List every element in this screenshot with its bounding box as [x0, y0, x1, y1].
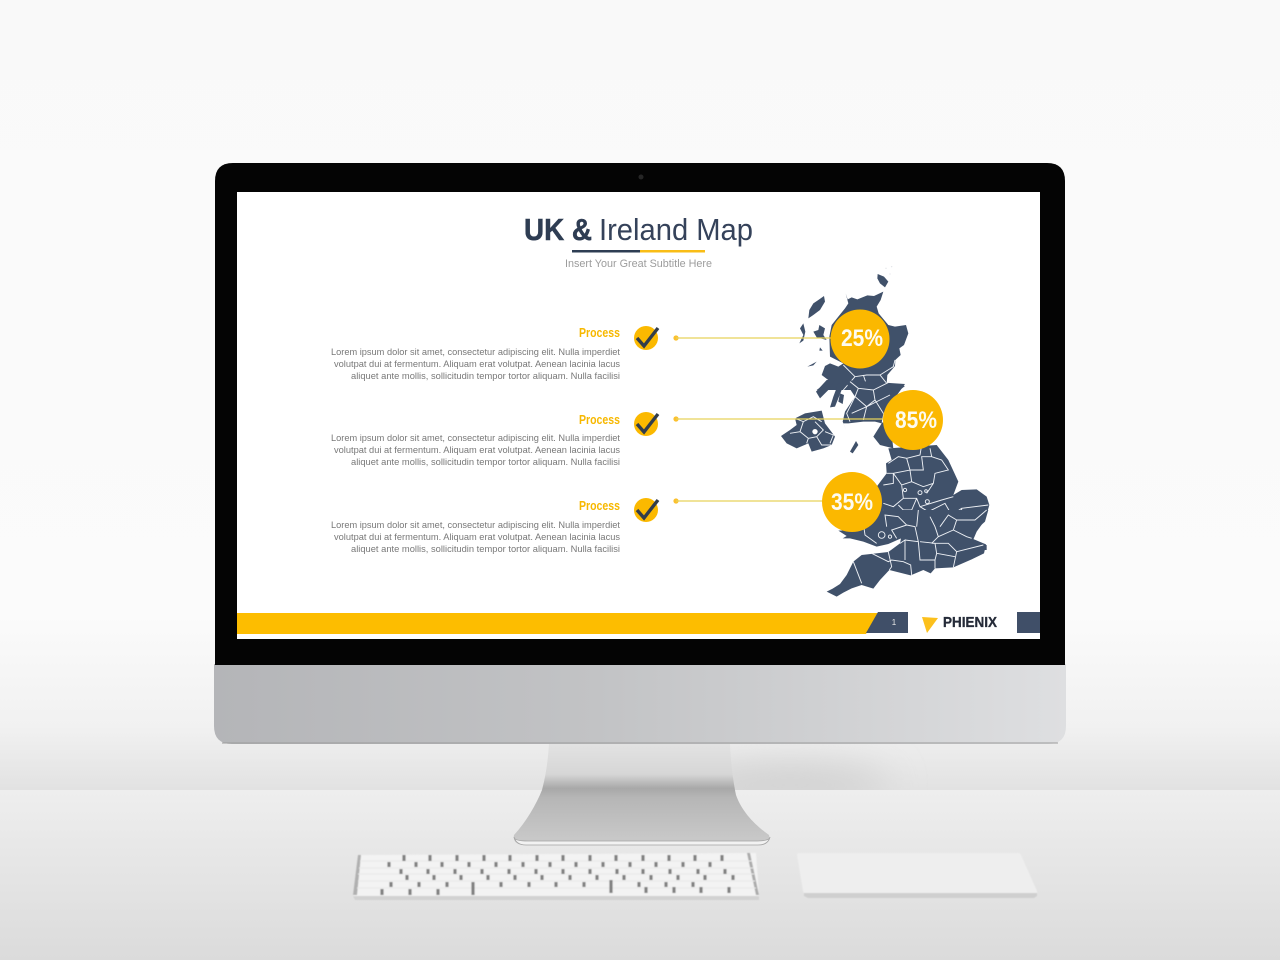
map: northern and central England — [870, 445, 989, 550]
text block 2: aliquet ante mollis, sollicitudin tempor tortor aliquam. Nulla facilisi — [351, 457, 620, 468]
background: desk — [0, 790, 1280, 960]
monitor stand — [514, 744, 770, 845]
map: Wales and southern England — [827, 510, 988, 597]
stand shadow on wall — [690, 763, 890, 807]
leader line 3 — [673, 498, 824, 504]
Lough Neagh — [812, 429, 818, 434]
footer — [237, 612, 1040, 634]
icon: check 3 — [634, 498, 658, 522]
leader line 1 — [673, 335, 832, 341]
map: northern Scotland — [799, 266, 908, 390]
logo wordmark: PHIENIX — [943, 615, 997, 631]
webcam — [638, 174, 644, 180]
screen: slide — [237, 192, 1040, 639]
trackpad — [797, 853, 1037, 898]
badge: 35% — [822, 472, 882, 532]
title: Ireland Map — [599, 212, 753, 247]
subtitle: Insert Your Great Subtitle Here — [565, 258, 712, 270]
badge: 85%: 85% — [895, 407, 937, 434]
map: southern Scotland and Northern Ireland — [781, 380, 905, 453]
item 2 — [331, 412, 658, 468]
badge: 25%: 25% — [841, 325, 883, 352]
badge: 25% — [830, 310, 890, 368]
title — [524, 212, 753, 247]
badge: 85% — [883, 390, 943, 450]
footer yellow bar — [237, 613, 878, 634]
keyboard — [353, 853, 759, 900]
footer page number tab — [866, 612, 908, 633]
text block 2: volutpat dui at fermentum. Aliquam erat volutpat. Aenean lacinia lacus — [334, 445, 620, 456]
text block 2 — [331, 433, 620, 468]
text block 3: aliquet ante mollis, sollicitudin tempor tortor aliquam. Nulla facilisi — [351, 544, 620, 555]
title underline — [572, 250, 705, 252]
monitor bezel — [215, 163, 1065, 665]
heading: process 2: Process — [579, 412, 620, 427]
keyboard key gaps — [382, 855, 733, 895]
text block 3: volutpat dui at fermentum. Aliquam erat volutpat. Aenean lacinia lacus — [334, 532, 620, 543]
heading: process 3: Process — [579, 498, 620, 513]
icon: check 2 — [634, 412, 658, 436]
text block 3: Lorem ipsum dolor sit amet, consectetur adipiscing elit. Nulla imperdiet — [331, 520, 620, 531]
leader line 2 — [673, 416, 885, 422]
text block 1: volutpat dui at fermentum. Aliquam erat volutpat. Aenean lacinia lacus — [334, 359, 620, 370]
text block 1 — [331, 347, 620, 382]
page number: 1 — [892, 618, 897, 627]
logo mark — [922, 617, 938, 633]
item 3 — [331, 498, 658, 555]
icon: check 1 — [634, 326, 658, 350]
text block 2: Lorem ipsum dolor sit amet, consectetur adipiscing elit. Nulla imperdiet — [331, 433, 620, 444]
footer right tab — [1017, 612, 1040, 633]
map: UK and Ireland — [781, 266, 989, 597]
text block 1: Lorem ipsum dolor sit amet, consectetur adipiscing elit. Nulla imperdiet — [331, 347, 620, 358]
title: UK & — [524, 212, 592, 247]
badge: 35%: 35% — [831, 489, 873, 516]
keyboard key seams — [357, 861, 756, 888]
item 1 — [331, 325, 658, 382]
text block 1: aliquet ante mollis, sollicitudin tempor tortor aliquam. Nulla facilisi — [351, 371, 620, 382]
chin bottom edge — [222, 742, 1058, 744]
monitor body — [214, 163, 1066, 744]
monitor chin — [214, 664, 1066, 744]
text block 3 — [331, 520, 620, 555]
heading: process 1: Process — [579, 325, 620, 340]
